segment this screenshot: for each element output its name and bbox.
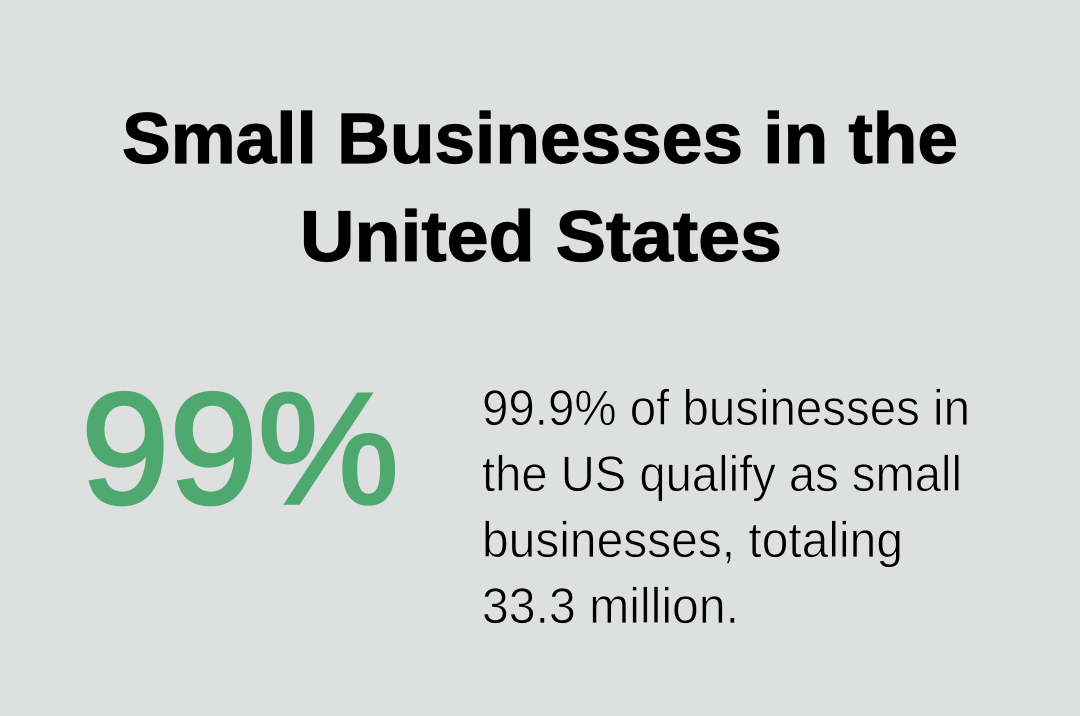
description text: 33.3 million.: [482, 578, 739, 634]
description text: [482, 380, 970, 634]
description text: 99.9% of businesses in: [482, 380, 970, 436]
description text: businesses, totaling: [482, 512, 903, 568]
description text: the US qualify as small: [482, 446, 962, 502]
title: [122, 100, 958, 277]
title: Small Businesses in the: [122, 100, 958, 179]
big statistic: 99%: 99%: [81, 361, 399, 537]
title: United States: [300, 198, 782, 277]
